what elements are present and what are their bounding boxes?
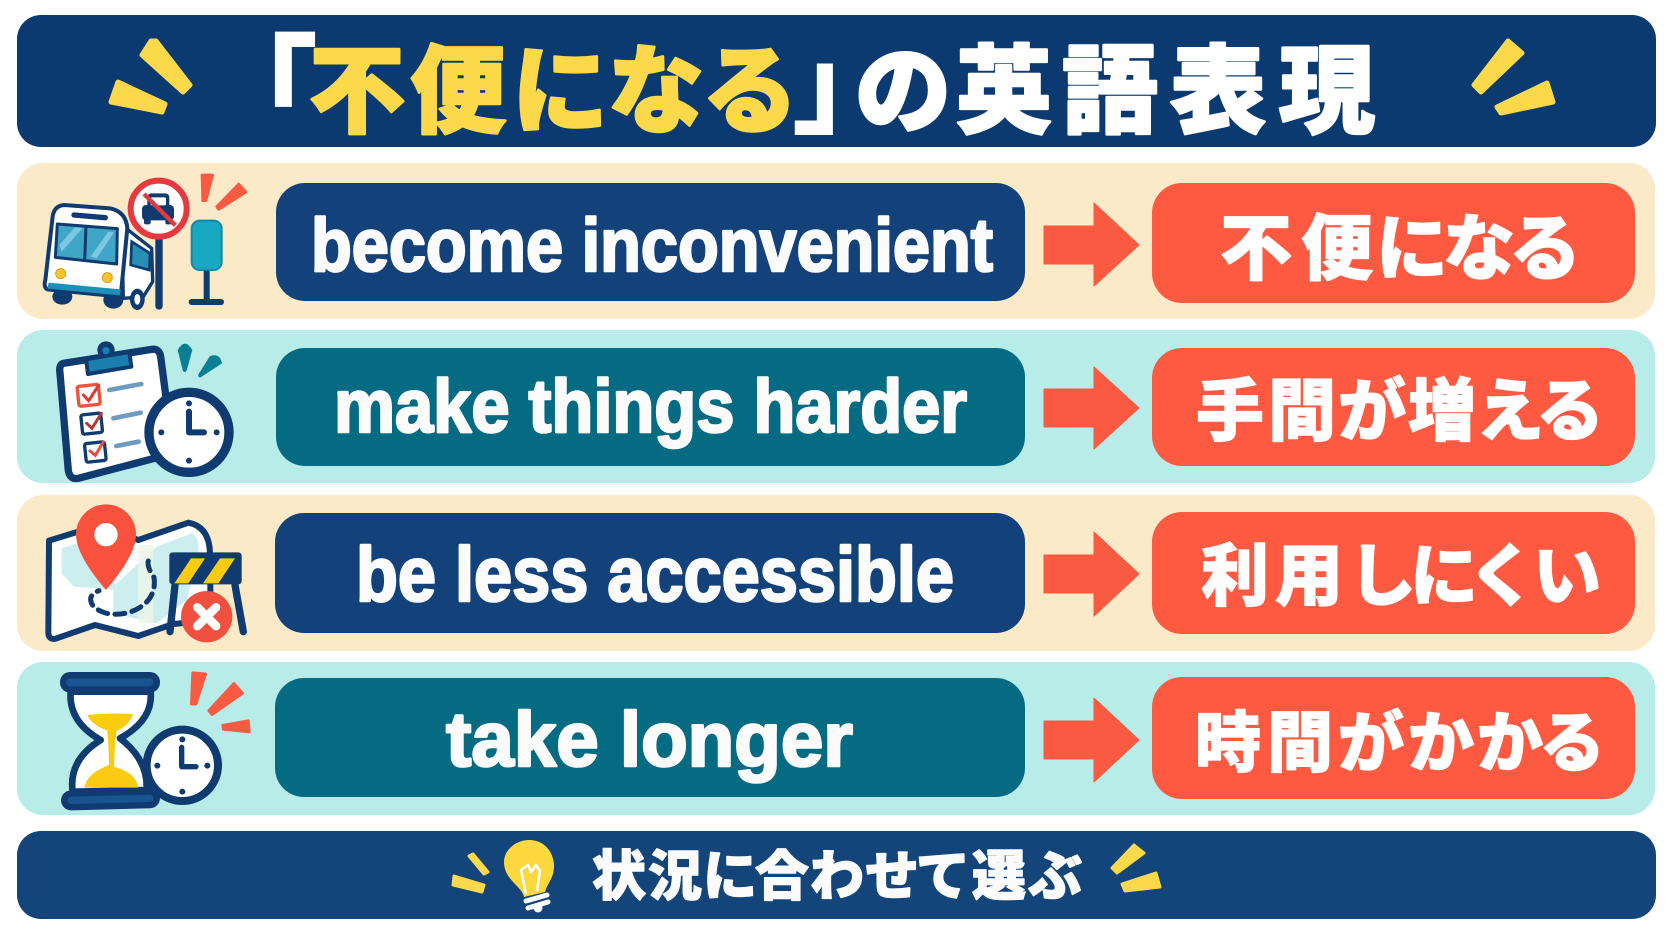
- japanese pill: [1152, 348, 1635, 466]
- english pill: [276, 183, 1025, 301]
- english pill: become inconvenient: [311, 203, 993, 287]
- panel: row 3: [17, 495, 1655, 651]
- icon: checklist and clock: [60, 341, 229, 479]
- english pill: make things harder: [334, 364, 967, 448]
- japanese pill: 利用しにくい: [1201, 539, 1601, 615]
- japanese pill: 手間が増える: [1196, 374, 1604, 450]
- footer text: 状況に合わせて選ぶ: [592, 847, 1082, 907]
- arrow: [1044, 203, 1139, 286]
- japanese pill: 不便になる: [1220, 210, 1581, 290]
- japanese pill: [1152, 677, 1635, 799]
- title text: の英語表現: [855, 39, 1375, 146]
- english pill: [276, 348, 1025, 466]
- japanese pill: [1152, 512, 1635, 634]
- icon: bus stop out of service: [45, 175, 246, 310]
- icon: light bulb: [504, 840, 554, 912]
- icon: right footer rays: [1112, 845, 1160, 891]
- japanese pill: 時間がかかる: [1195, 706, 1605, 780]
- panel: row 1: [17, 163, 1655, 319]
- panel: row 4: [17, 662, 1655, 815]
- icon: map with blocked route: [48, 504, 243, 642]
- panel: row 2: [17, 330, 1655, 483]
- japanese pill: [1152, 183, 1635, 303]
- arrow: [1044, 367, 1139, 449]
- icon: left yellow rays: [111, 41, 190, 112]
- arrow: [1044, 698, 1139, 782]
- title text: 」: [792, 23, 904, 148]
- footer banner: [17, 831, 1656, 919]
- icon: right yellow rays: [1474, 41, 1553, 113]
- english pill: [275, 513, 1025, 633]
- icon: hourglass and clock: [60, 672, 249, 811]
- english pill: [275, 678, 1025, 797]
- title banner: [17, 15, 1656, 159]
- icon: left footer rays: [453, 854, 488, 892]
- english pill: take longer: [446, 697, 853, 783]
- english pill: be less accessible: [356, 532, 954, 618]
- title text: 不便になる: [309, 39, 798, 146]
- title text: 「: [200, 27, 318, 159]
- arrow: [1044, 532, 1139, 616]
